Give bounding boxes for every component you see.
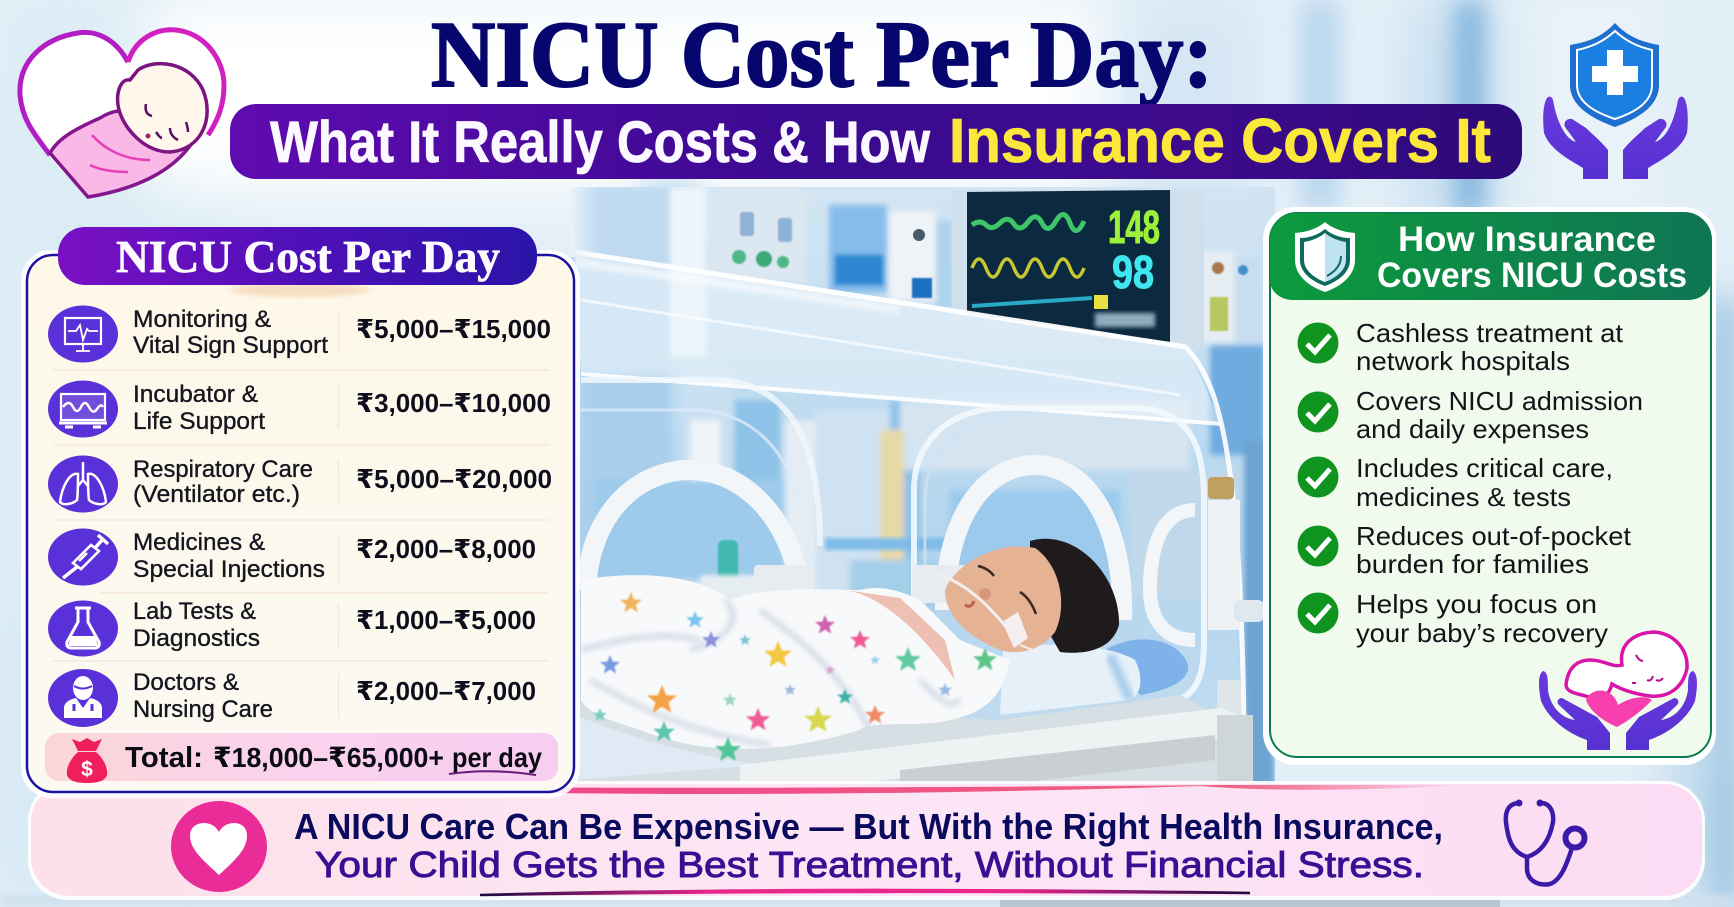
incubator label — [133, 381, 265, 435]
blanket — [581, 575, 1010, 761]
lab tests label: Diagnostics — [133, 625, 260, 652]
doctors price: ₹2,000–₹7,000 — [356, 676, 536, 706]
total text: ₹18,000–₹65,000+ — [213, 742, 444, 773]
monitoring label: Monitoring & — [133, 306, 271, 333]
row: medicines — [48, 528, 536, 586]
lab tests label: Lab Tests & — [133, 598, 256, 625]
icon: heart badge — [171, 801, 267, 892]
baby head — [118, 64, 207, 152]
total bar — [45, 733, 558, 783]
lab tests label — [133, 598, 260, 652]
subtitle pill — [230, 104, 1522, 179]
incubator price: ₹3,000–₹10,000 — [356, 388, 551, 418]
total text — [125, 742, 542, 775]
banner text: A NICU Care Can Be Expensive — But With the Right Health Insurance, — [294, 806, 1443, 847]
medicines label: Medicines & — [133, 529, 265, 556]
row: monitoring — [48, 306, 551, 362]
monitoring price: ₹5,000–₹15,000 — [356, 314, 551, 344]
baby head — [940, 539, 1119, 655]
subtitle yellow text: Insurance Covers It — [949, 107, 1491, 176]
row: lab tests — [48, 598, 536, 656]
respiratory label: (Ventilator etc.) — [133, 481, 300, 508]
subtitle white text: What It Really Costs & How — [270, 110, 931, 175]
total text: Total: — [125, 742, 203, 774]
benefit: critical care: Includes critical care, — [1356, 453, 1613, 483]
monitor readings: 148 — [1108, 201, 1160, 253]
heart baby logo — [20, 30, 224, 197]
benefit: admission: Covers NICU admission — [1356, 386, 1643, 416]
header text: Covers NICU Costs — [1377, 256, 1687, 295]
icon: baby in hands — [1539, 632, 1697, 750]
row: incubator — [48, 380, 551, 438]
bed tray — [575, 695, 1253, 790]
panel header — [1270, 213, 1711, 300]
icon: monitor — [48, 306, 118, 362]
background medical machines — [570, 187, 1274, 790]
incubator label: Life Support — [133, 408, 265, 435]
doctors label: Nursing Care — [133, 696, 273, 723]
benefit: cashless: network hospitals — [1356, 346, 1570, 376]
icon: money bag: $ — [81, 758, 93, 781]
icon: syringe — [48, 528, 118, 586]
header text: How Insurance — [1398, 220, 1656, 259]
pillow — [1000, 639, 1188, 715]
bottom message banner — [28, 781, 1705, 900]
icon: stethoscope — [1506, 800, 1584, 884]
medicines label — [133, 529, 325, 583]
incubator label: Incubator & — [133, 381, 258, 408]
icon: flask — [48, 600, 118, 656]
respiratory label: Respiratory Care — [133, 456, 313, 483]
incubator latch and side panel — [754, 477, 1264, 730]
benefit: recovery: Helps you focus on — [1356, 589, 1597, 619]
swaddle blanket — [50, 111, 192, 197]
doctors label — [133, 669, 273, 723]
benefit: cashless: Cashless treatment at — [1356, 318, 1624, 348]
respiratory label — [133, 456, 313, 508]
icon: shield — [1295, 222, 1355, 292]
medicines label: Special Injections — [133, 556, 325, 583]
icon: insurance shield and hands — [1543, 23, 1688, 179]
benefit: recovery: your baby’s recovery — [1356, 618, 1608, 648]
lab tests price: ₹1,000–₹5,000 — [356, 605, 536, 635]
benefit: critical care — [1298, 453, 1613, 512]
benefit: admission: and daily expenses — [1356, 414, 1589, 444]
row: respiratory — [48, 456, 552, 512]
row: doctors — [48, 669, 536, 727]
header text — [1377, 220, 1687, 295]
banner text — [294, 806, 1443, 885]
benefit: recovery — [1298, 589, 1608, 648]
total text: per day — [452, 742, 542, 773]
respiratory price: ₹5,000–₹20,000 — [356, 464, 552, 494]
panel: how insurance covers NICU costs — [1263, 207, 1716, 765]
doctors label: Doctors & — [133, 669, 239, 696]
benefit: cashless — [1298, 318, 1624, 376]
benefit: out of pocket: Reduces out-of-pocket — [1356, 521, 1632, 551]
benefit: out of pocket — [1298, 521, 1632, 579]
benefit: admission — [1298, 386, 1643, 444]
icon: incubator — [48, 380, 118, 438]
patient monitor — [952, 190, 1204, 350]
incubator canopy — [575, 252, 1244, 726]
arm port rings — [586, 465, 1195, 640]
icon: lungs — [48, 456, 118, 512]
icon: money bag — [67, 738, 107, 783]
medicines price: ₹2,000–₹8,000 — [356, 534, 536, 564]
icon: doctor — [48, 669, 118, 727]
photo: newborn in NICU incubator — [570, 187, 1275, 792]
banner text: Your Child Gets the Best Treatment, Without Financial Stress. — [315, 844, 1424, 885]
benefit: critical care: medicines & tests — [1356, 482, 1571, 512]
monitor readings — [1110, 210, 1160, 289]
photo edge fades — [570, 187, 1275, 257]
panel: NICU cost per day — [21, 227, 580, 798]
title: NICU Cost Per Day: — [431, 3, 1213, 107]
benefit: out of pocket: burden for families — [1356, 549, 1589, 579]
monitor readings: 98 — [1112, 246, 1154, 298]
panel header pill: NICU Cost Per Day — [116, 231, 500, 282]
monitoring label: Vital Sign Support — [133, 332, 328, 359]
monitoring label — [133, 306, 328, 359]
